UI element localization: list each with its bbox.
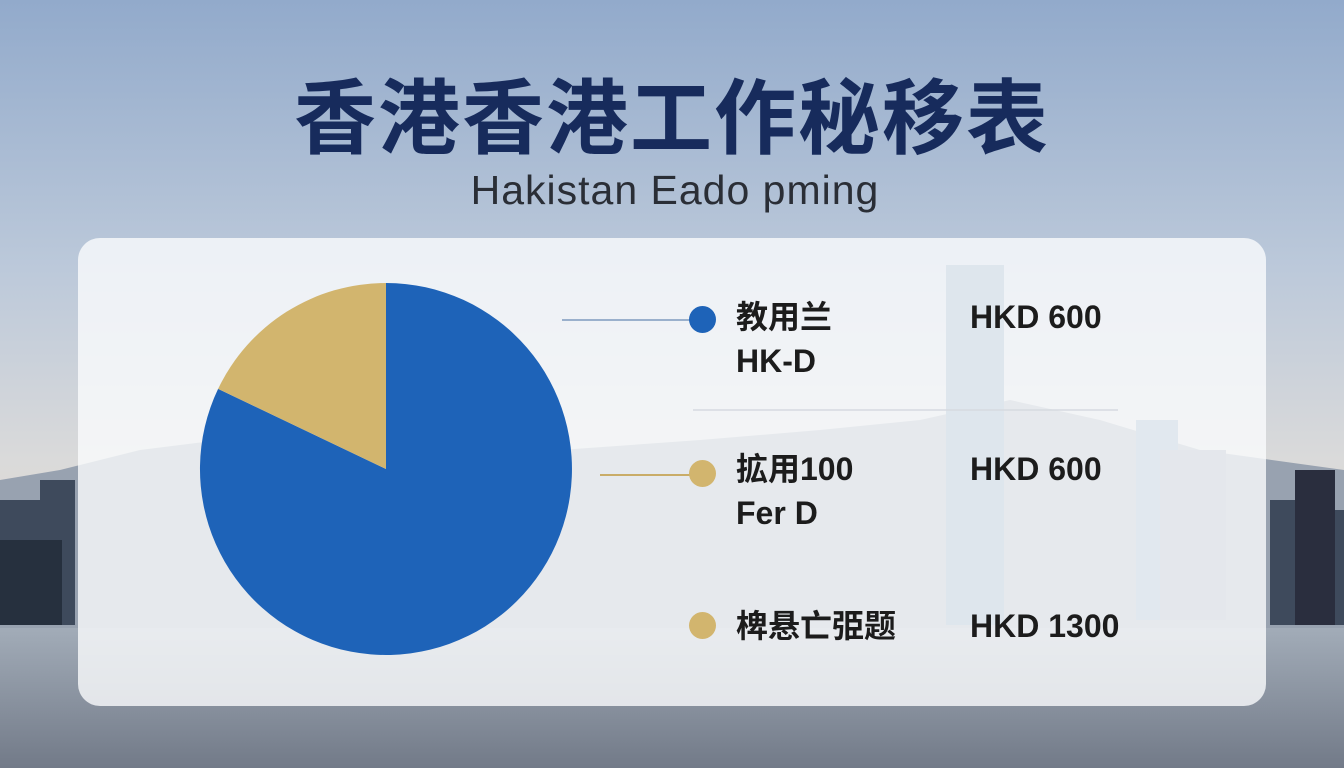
panel: white translucent card xyxy=(78,238,1266,706)
label 1: HK-D xyxy=(736,343,816,379)
value 1: HKD 600 xyxy=(970,299,1102,335)
value 3: HKD 1300 xyxy=(970,608,1119,644)
legend item 1 xyxy=(689,299,1102,379)
icon: blue dot xyxy=(689,306,716,333)
legend item 3 xyxy=(689,608,1119,644)
icon: gold dot xyxy=(689,612,716,639)
label 2: 拡用100 xyxy=(736,451,853,487)
subtitle: Hakistan Eado pming xyxy=(471,167,879,213)
label 2 xyxy=(736,451,853,531)
value 2: HKD 600 xyxy=(970,451,1102,487)
legend item 2 xyxy=(689,451,1102,531)
icon: gold dot xyxy=(689,460,716,487)
title: 香港香港工作秘移表 xyxy=(294,74,1050,165)
label 3: 椑悬亡弫题 xyxy=(736,608,896,644)
label 1 xyxy=(736,299,832,379)
label 1: 教用兰 xyxy=(736,299,832,335)
label 2: Fer D xyxy=(736,495,818,531)
